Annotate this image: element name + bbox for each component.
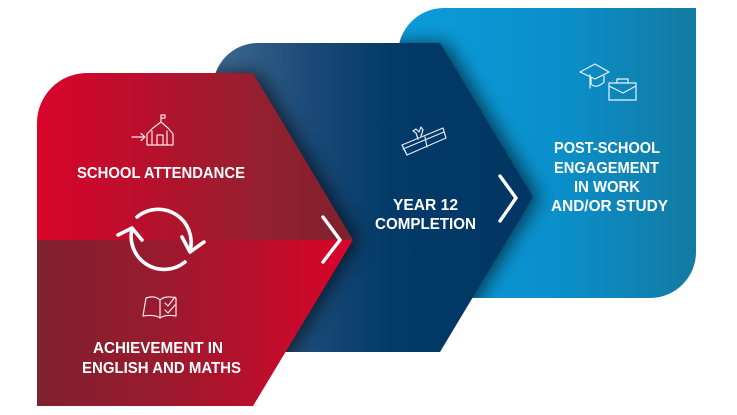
panel: school attendance and achievement <box>37 73 359 406</box>
icon: cycle arrows <box>118 209 204 269</box>
arrow: chevron to year 12 <box>323 217 340 262</box>
icon: graduation cap and briefcase <box>580 64 636 100</box>
heading: year 12 completion: COMPLETION <box>375 216 476 233</box>
heading: year 12 completion: YEAR 12 <box>393 197 458 214</box>
heading: achievement in english and maths <box>82 340 241 377</box>
arrow: chevron to post-school <box>500 176 516 221</box>
panel: year 12 completion <box>213 43 539 352</box>
heading: achievement in english and maths: ACHIEVEMENT IN <box>93 340 223 357</box>
heading: post-school engagement in work and/or study: POST-SCHOOL <box>554 140 660 157</box>
heading: post-school engagement in work and/or study <box>551 140 668 215</box>
heading: achievement in english and maths: ENGLISH AND MATHS <box>82 360 241 377</box>
heading: post-school engagement in work and/or study: AND/OR STUDY <box>551 198 668 215</box>
heading: post-school engagement in work and/or study: IN WORK <box>574 179 640 196</box>
icon: diploma scroll <box>402 127 446 155</box>
icon: school with arrow <box>132 115 173 145</box>
heading: year 12 completion <box>375 197 476 233</box>
icon: open book with checklist <box>143 297 176 318</box>
heading: post-school engagement in work and/or study: ENGAGEMENT <box>554 160 659 177</box>
panel: post-school engagement <box>398 8 696 298</box>
heading: school attendance: SCHOOL ATTENDANCE <box>77 165 245 182</box>
